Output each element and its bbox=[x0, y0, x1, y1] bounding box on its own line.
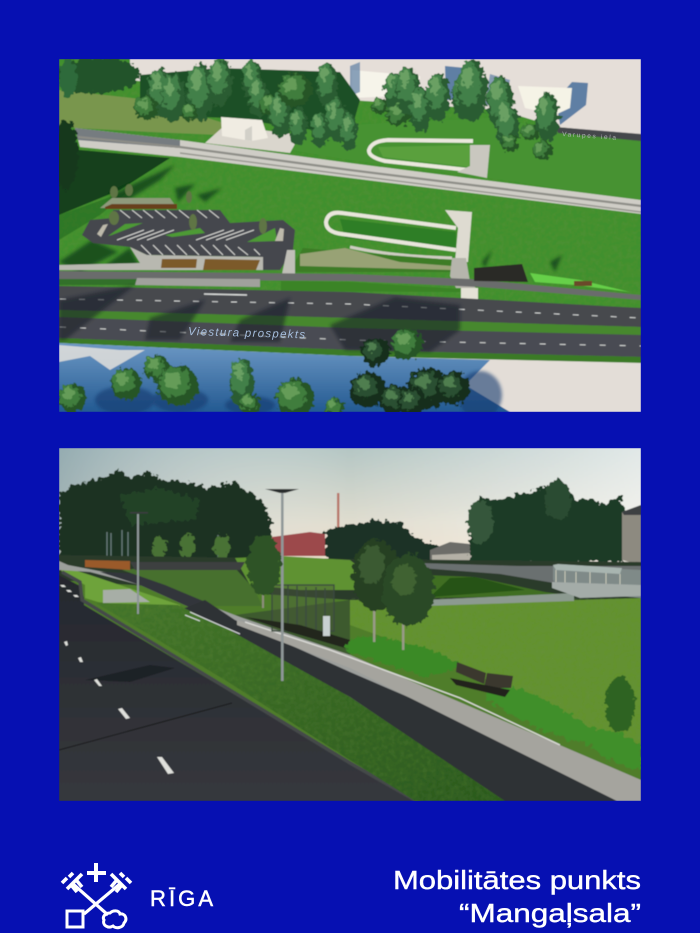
upper grass behind railway bbox=[270, 118, 641, 200]
flower hedge bbox=[85, 560, 130, 570]
mid-ground bushy grass bbox=[122, 566, 262, 606]
base lawn under scene bbox=[59, 555, 641, 801]
lane dashes bbox=[60, 585, 174, 774]
logo wordmark: RĪGA: RĪGA bbox=[150, 886, 213, 911]
front plaza with planters bbox=[59, 247, 295, 275]
low retaining wall bbox=[424, 593, 574, 606]
cross path at underpass bbox=[450, 258, 476, 288]
building facades bbox=[352, 70, 420, 98]
road: Varupes iela bbox=[556, 127, 641, 141]
kerb bbox=[62, 572, 420, 803]
lower ramp structure bbox=[295, 210, 472, 272]
small young trees bbox=[152, 534, 230, 560]
icon: key with clover bow bbox=[62, 873, 126, 928]
houses in distance bbox=[430, 542, 490, 562]
white kiosk bbox=[323, 616, 330, 636]
sunken ramp lawn bbox=[425, 575, 574, 598]
lower ground bbox=[59, 343, 641, 412]
asphalt carriageway bbox=[59, 575, 415, 801]
white building bbox=[221, 117, 268, 141]
far dark bike lane bbox=[100, 572, 205, 612]
sky bbox=[59, 448, 641, 573]
lower tree row bbox=[58, 328, 470, 418]
road label: Varupes iela: Varupes iela bbox=[562, 131, 617, 142]
distant grass lawn bbox=[235, 556, 365, 590]
tree shadows on grass bbox=[59, 165, 562, 272]
main lawn bbox=[350, 598, 641, 745]
shelter ground bbox=[235, 600, 350, 660]
roadside strip bbox=[59, 338, 641, 363]
birch trees right bbox=[467, 478, 632, 565]
image: street-level view of mobility point bbox=[59, 448, 641, 803]
red building bbox=[272, 532, 325, 556]
lamp posts bbox=[130, 489, 299, 681]
shadows across the roads bbox=[59, 285, 460, 352]
plaza by white building bbox=[204, 128, 296, 154]
upper tree row bbox=[56, 57, 559, 160]
building facade right bbox=[518, 86, 572, 115]
bright hedge left bbox=[345, 636, 462, 675]
green median bbox=[238, 320, 239, 321]
pavement bbox=[237, 620, 641, 801]
far plain bbox=[59, 555, 641, 600]
apartment building right bbox=[622, 505, 641, 565]
bike symbols on path bbox=[185, 612, 240, 634]
tree shadows on lower ground bbox=[95, 371, 502, 419]
bright hedge right bbox=[487, 686, 641, 770]
shelter plinth bbox=[245, 617, 350, 648]
shadow on road bbox=[85, 665, 175, 682]
benches bbox=[450, 662, 513, 697]
young tree near median bbox=[247, 535, 281, 608]
canopy right bbox=[552, 564, 641, 598]
far road bbox=[420, 563, 641, 584]
flower bed behind parking bbox=[100, 198, 177, 209]
technical box bbox=[103, 589, 150, 603]
ground: grass bbox=[59, 59, 641, 363]
icon: key with square bow bbox=[67, 873, 131, 927]
near-left verge bbox=[59, 565, 180, 612]
building shadows bbox=[350, 62, 588, 125]
roadway north bbox=[59, 286, 641, 327]
trees on the lawn bbox=[352, 539, 434, 650]
far road behind hedge bbox=[130, 562, 245, 570]
lane markings bbox=[60, 294, 641, 346]
underpass entry bbox=[461, 288, 478, 300]
logo: Rīga crossed keys bbox=[62, 863, 131, 928]
dense tree backdrop bbox=[140, 68, 360, 135]
upper ramp structure bbox=[369, 140, 490, 178]
bus stop by road bbox=[474, 264, 630, 292]
small conifer bbox=[605, 677, 635, 733]
bike path bbox=[180, 600, 617, 801]
railway corridor bbox=[75, 128, 641, 214]
icon: cross bbox=[87, 863, 106, 882]
title line 2: “Mangaļsala” bbox=[459, 898, 641, 928]
roadway south bbox=[59, 317, 641, 357]
parking islands bbox=[97, 223, 284, 242]
bus shelter bbox=[272, 585, 334, 633]
dark grass left shadow bbox=[59, 150, 170, 215]
buildings and pale ground at top bbox=[130, 59, 641, 135]
forest left bbox=[59, 470, 272, 562]
forest trunks bbox=[107, 530, 218, 562]
upper-left meadow bbox=[59, 90, 230, 135]
distant tree line bbox=[325, 520, 440, 562]
infographic page bbox=[59, 59, 641, 930]
far path bbox=[59, 561, 641, 801]
image: aerial view of mobility point bbox=[54, 57, 641, 419]
grass median bbox=[96, 603, 505, 801]
dark tree at left edge bbox=[59, 119, 80, 190]
parking bay markings bbox=[117, 210, 260, 255]
parking lot bbox=[82, 210, 295, 270]
title line 1: Mobilitātes punkts bbox=[393, 865, 641, 895]
small trees around the parking bbox=[109, 184, 267, 234]
service road bbox=[59, 271, 641, 300]
title bbox=[393, 865, 641, 928]
road label: Viestura prospekts: Viestura prospekts bbox=[188, 326, 305, 341]
road crack line bbox=[59, 703, 232, 750]
telecom mast bbox=[337, 493, 339, 531]
